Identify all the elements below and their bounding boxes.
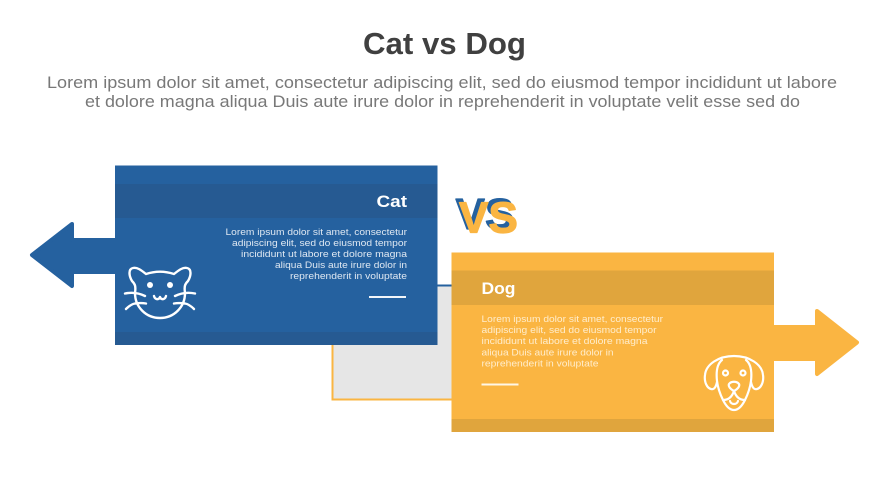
cat underline [369, 296, 406, 298]
dog body text: incididunt ut labore et dolore magna [482, 336, 649, 346]
connector: grey box behind panels [332, 285, 452, 400]
cat heading: Cat [376, 193, 408, 211]
dog body text: reprehenderit in voluptate [482, 358, 598, 368]
dog body text: Lorem ipsum dolor sit amet, consectetur [482, 314, 663, 324]
dog underline [482, 384, 518, 386]
cat body text: adipiscing elit, sed do eiusmod tempor [232, 238, 407, 248]
cat body text: incididunt ut labore et dolore magna [241, 249, 408, 259]
cat footer band [115, 332, 438, 345]
dog body text: adipiscing elit, sed do eiusmod tempor [482, 325, 656, 335]
panel: dog [452, 252, 774, 432]
vs badge: V [459, 194, 489, 242]
vs badge: S [488, 194, 518, 242]
subtitle text: Lorem ipsum dolor sit amet, consectetur adipiscing elit, sed do eiusmod tempor incididunt ut labore [47, 74, 837, 92]
panel: cat [115, 166, 438, 345]
dog header band [452, 270, 774, 305]
icon: cat face [125, 268, 195, 318]
dog body text: aliqua Duis aute irure dolor in [482, 348, 614, 358]
cat body text: aliqua Duis aute irure dolor in [275, 260, 407, 270]
vs badge: S [485, 190, 514, 239]
arrow: left blue [32, 224, 116, 286]
dog footer band [452, 419, 774, 432]
arrow: right yellow [773, 311, 857, 374]
cat body text: Lorem ipsum dolor sit amet, consectetur [226, 227, 407, 237]
icon: dog face [705, 356, 763, 410]
subtitle text [47, 74, 837, 111]
dog body text [482, 314, 663, 368]
vs badge: V [456, 190, 486, 239]
title: Cat vs Dog [363, 26, 526, 61]
dog panel background [452, 252, 774, 432]
cat header band [115, 184, 438, 218]
dog heading: Dog [482, 280, 516, 298]
subtitle text: et dolore magna aliqua Duis aute irure dolor in reprehenderit in voluptate velit esse sed do [85, 93, 800, 111]
cat body text [226, 227, 408, 281]
cat panel background [115, 166, 438, 345]
vs badge [456, 190, 518, 242]
cat body text: reprehenderit in voluptate [290, 271, 407, 281]
